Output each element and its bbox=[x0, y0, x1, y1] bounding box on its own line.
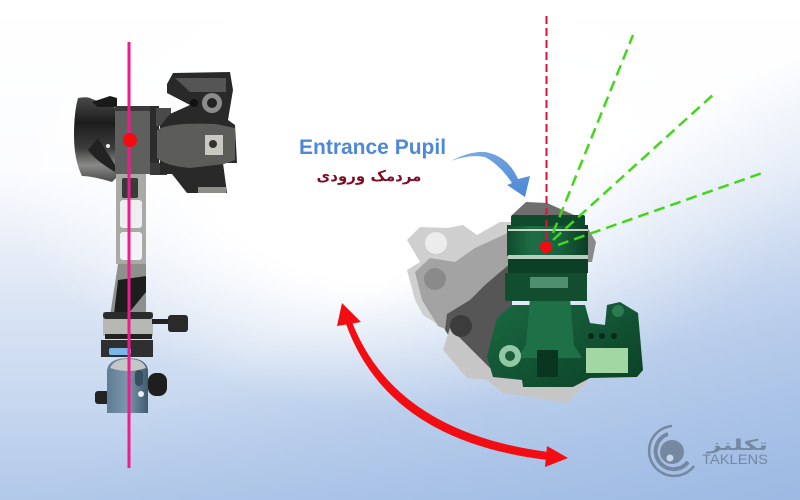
curved blue arrow bbox=[451, 152, 530, 197]
vertical pink axis line bbox=[128, 42, 130, 468]
red vertical dashed line bbox=[546, 16, 548, 243]
left red pupil dot bbox=[123, 133, 137, 147]
panning clamp and knob bbox=[101, 312, 188, 357]
lens rings bbox=[507, 225, 588, 256]
panoramic rail bbox=[110, 172, 146, 316]
hot shoe bbox=[537, 350, 558, 377]
heading: Entrance Pupil: Entrance Pupil bbox=[299, 136, 446, 159]
green camera top view bbox=[487, 215, 643, 387]
ghost rotated camera positions bbox=[407, 202, 596, 403]
curved red double arrow bbox=[337, 303, 568, 467]
logo: Taklens: TAKLENS bbox=[702, 451, 768, 467]
logo: Taklens bbox=[649, 426, 768, 476]
lens hood bbox=[74, 96, 117, 182]
Persian subtitle: مردمک ورودی bbox=[317, 167, 421, 185]
lens barrel bbox=[115, 106, 171, 175]
ball head bbox=[95, 358, 167, 413]
camera body bbox=[157, 72, 237, 193]
left photo: camera on panoramic rail bbox=[74, 72, 237, 413]
logo wordmark: تکلنز bbox=[706, 436, 768, 454]
top buttons bbox=[588, 333, 617, 339]
mode dial bbox=[499, 345, 521, 367]
body bbox=[487, 302, 643, 387]
logo mark bbox=[649, 426, 694, 476]
lens mount bbox=[505, 273, 587, 301]
lcd panel bbox=[586, 348, 628, 373]
prism bbox=[518, 298, 582, 358]
green dashed rays bbox=[553, 35, 765, 245]
right red pupil dot bbox=[540, 241, 552, 253]
grip detail bbox=[612, 305, 624, 317]
